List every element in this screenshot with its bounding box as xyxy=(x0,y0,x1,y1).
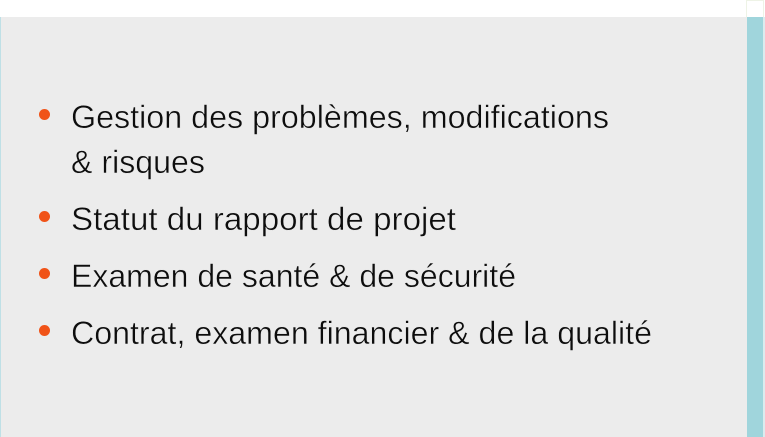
bullet 1: Gestion des problèmes: Gestion des problèmes, modifications xyxy=(71,99,609,135)
right edge pale strip xyxy=(763,17,765,437)
bullet 1: Gestion des problèmes: & risques xyxy=(71,144,205,180)
bullet 2: Statut du rapport: Statut du rapport de projet xyxy=(71,201,456,237)
bullet 4: Contrat: Contrat, examen financier & de la qualité xyxy=(71,315,652,351)
left edge strip xyxy=(0,17,1,437)
bullet 1: Gestion des problèmes xyxy=(39,99,609,180)
top right pale outline xyxy=(746,0,764,18)
right teal band xyxy=(747,17,763,437)
bullet list xyxy=(39,99,652,351)
bullet 3: Examen de santé: Examen de santé & de sécurité xyxy=(71,258,516,294)
